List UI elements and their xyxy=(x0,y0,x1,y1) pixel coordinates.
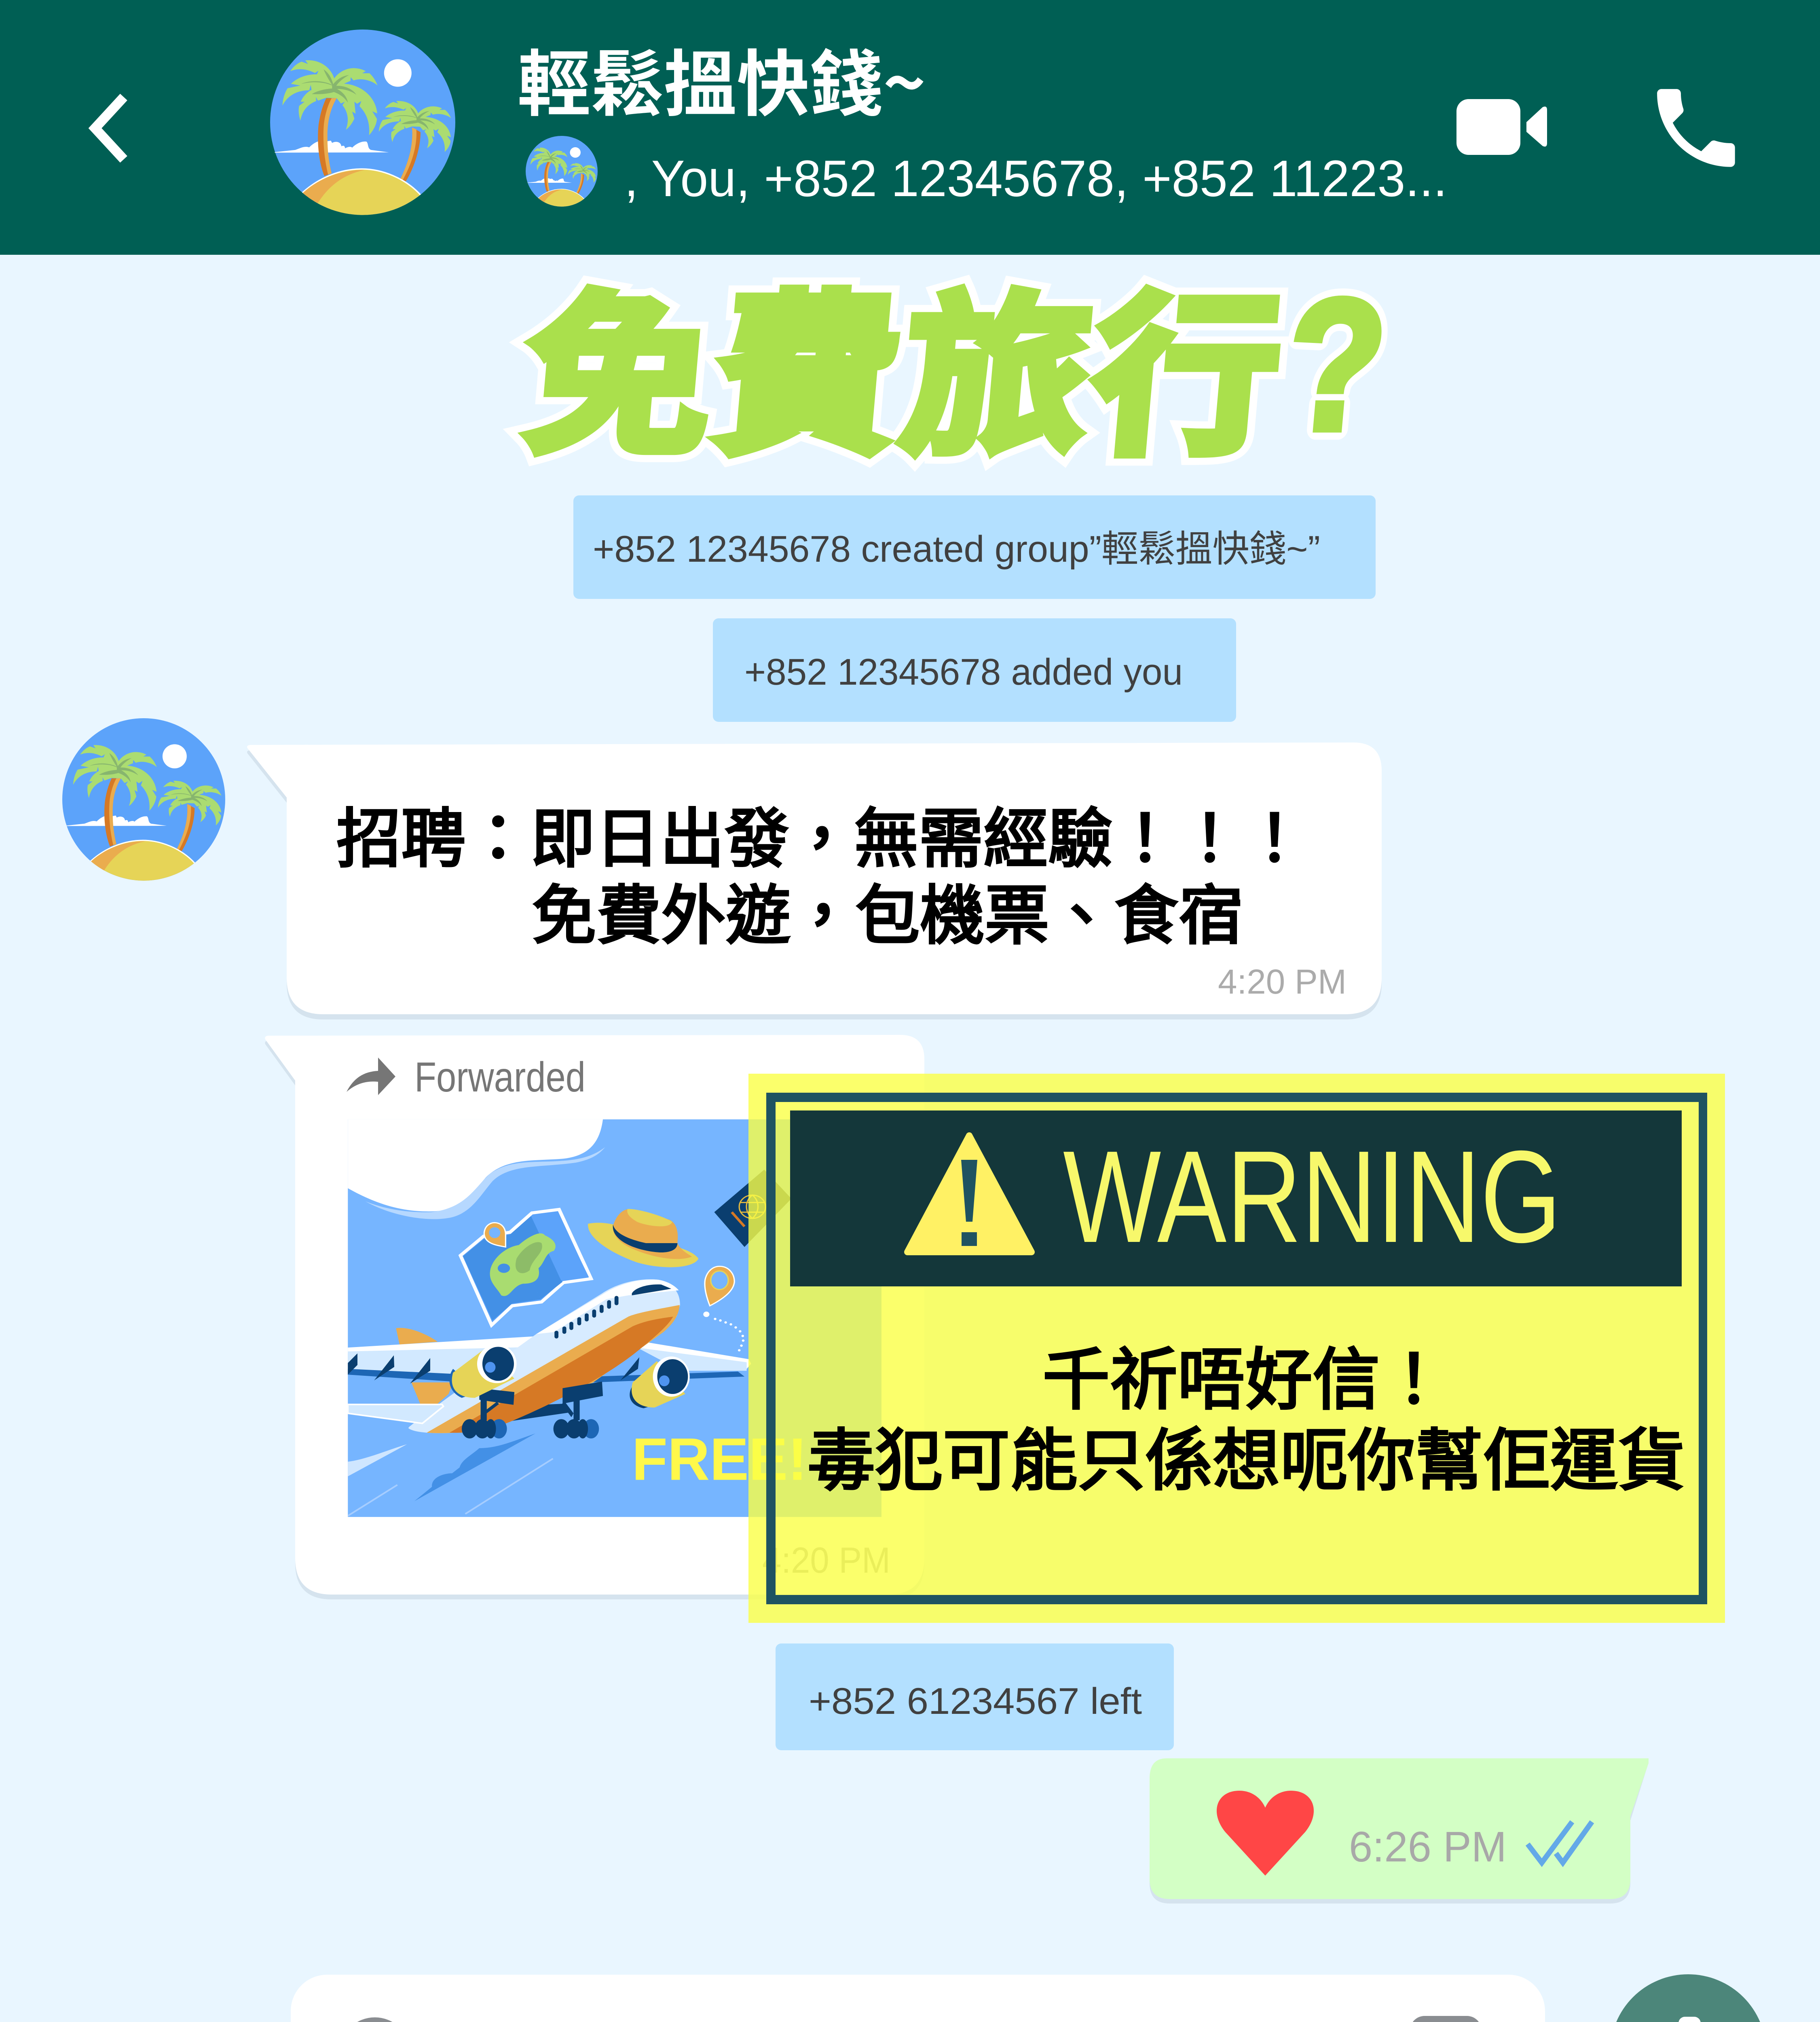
icon: read ticks xyxy=(1528,1822,1592,1863)
timestamp: 4:20 PM xyxy=(1218,962,1347,1001)
system message: group created xyxy=(573,495,1376,599)
small member avatar xyxy=(526,136,598,209)
header bar xyxy=(0,0,1820,255)
icon: emoji xyxy=(342,2021,407,2022)
panel frame xyxy=(766,1093,1707,1604)
airplane xyxy=(348,1280,751,1438)
warning banner xyxy=(790,1110,1682,1286)
message text: 免費外遊，包機票、食宿 xyxy=(532,863,1243,957)
warning message: 毒犯可能只係想呃你幫佢運貨 xyxy=(807,1406,1685,1504)
icon: video camera xyxy=(1456,99,1547,155)
icon: camera xyxy=(1410,2016,1482,2022)
system message: group created: +852 12345678 created group”輕鬆搵快錢~” xyxy=(593,529,1320,570)
icon: forward arrow xyxy=(347,1058,395,1095)
free! caption: FREE! xyxy=(632,1426,807,1493)
message text: 招聘：即日出發，無需經驗！！！ xyxy=(336,787,1307,880)
member list: , You, +852 12345678, +852 11223... xyxy=(624,150,1447,207)
system message: added you xyxy=(713,618,1236,722)
system message: member left: +852 61234567 left xyxy=(809,1681,1142,1722)
chat bubble: own reply xyxy=(1150,1758,1649,1904)
timestamp under overlay: 4:20 PM xyxy=(762,1540,890,1581)
warning panel xyxy=(748,1074,1725,1623)
passport xyxy=(714,1170,791,1247)
microphone button xyxy=(1610,1974,1766,2022)
clouds and speed lines xyxy=(348,1434,553,1516)
icon: back chevron xyxy=(95,97,124,159)
title: free travel?: ? xyxy=(1279,261,1393,468)
title: free travel?: ? xyxy=(1279,261,1393,468)
icon: phone xyxy=(1657,89,1735,167)
warning message: 千祈唔好信！ xyxy=(1042,1325,1448,1423)
timestamp: 6:26 PM xyxy=(1349,1823,1507,1871)
icon: microphone xyxy=(1668,2017,1712,2022)
map xyxy=(461,1210,591,1325)
group avatar xyxy=(270,30,455,222)
system message: member left xyxy=(776,1643,1174,1750)
dotted route xyxy=(703,1311,744,1352)
chat bubble: forwarded image xyxy=(265,1035,924,1599)
chat bubble: job offer xyxy=(247,742,1382,1019)
location pin xyxy=(705,1266,734,1306)
group name: 輕鬆搵快錢~ xyxy=(518,27,926,131)
system message: added you: +852 12345678 added you xyxy=(744,651,1183,693)
warning word: WARNING xyxy=(1063,1123,1561,1270)
title: free travel?: 免費旅行 xyxy=(514,234,1293,489)
icon: warning triangle xyxy=(907,1136,1032,1252)
title: free travel?: 免費旅行 xyxy=(514,234,1293,489)
message input bar xyxy=(291,1975,1545,2022)
sender avatar xyxy=(62,718,225,887)
forwarded label: Forwarded xyxy=(414,1054,586,1101)
hat xyxy=(588,1209,698,1267)
travel illustration xyxy=(348,1119,881,1517)
icon: heart xyxy=(1217,1791,1314,1876)
icon: paperclip xyxy=(1265,2012,1342,2022)
